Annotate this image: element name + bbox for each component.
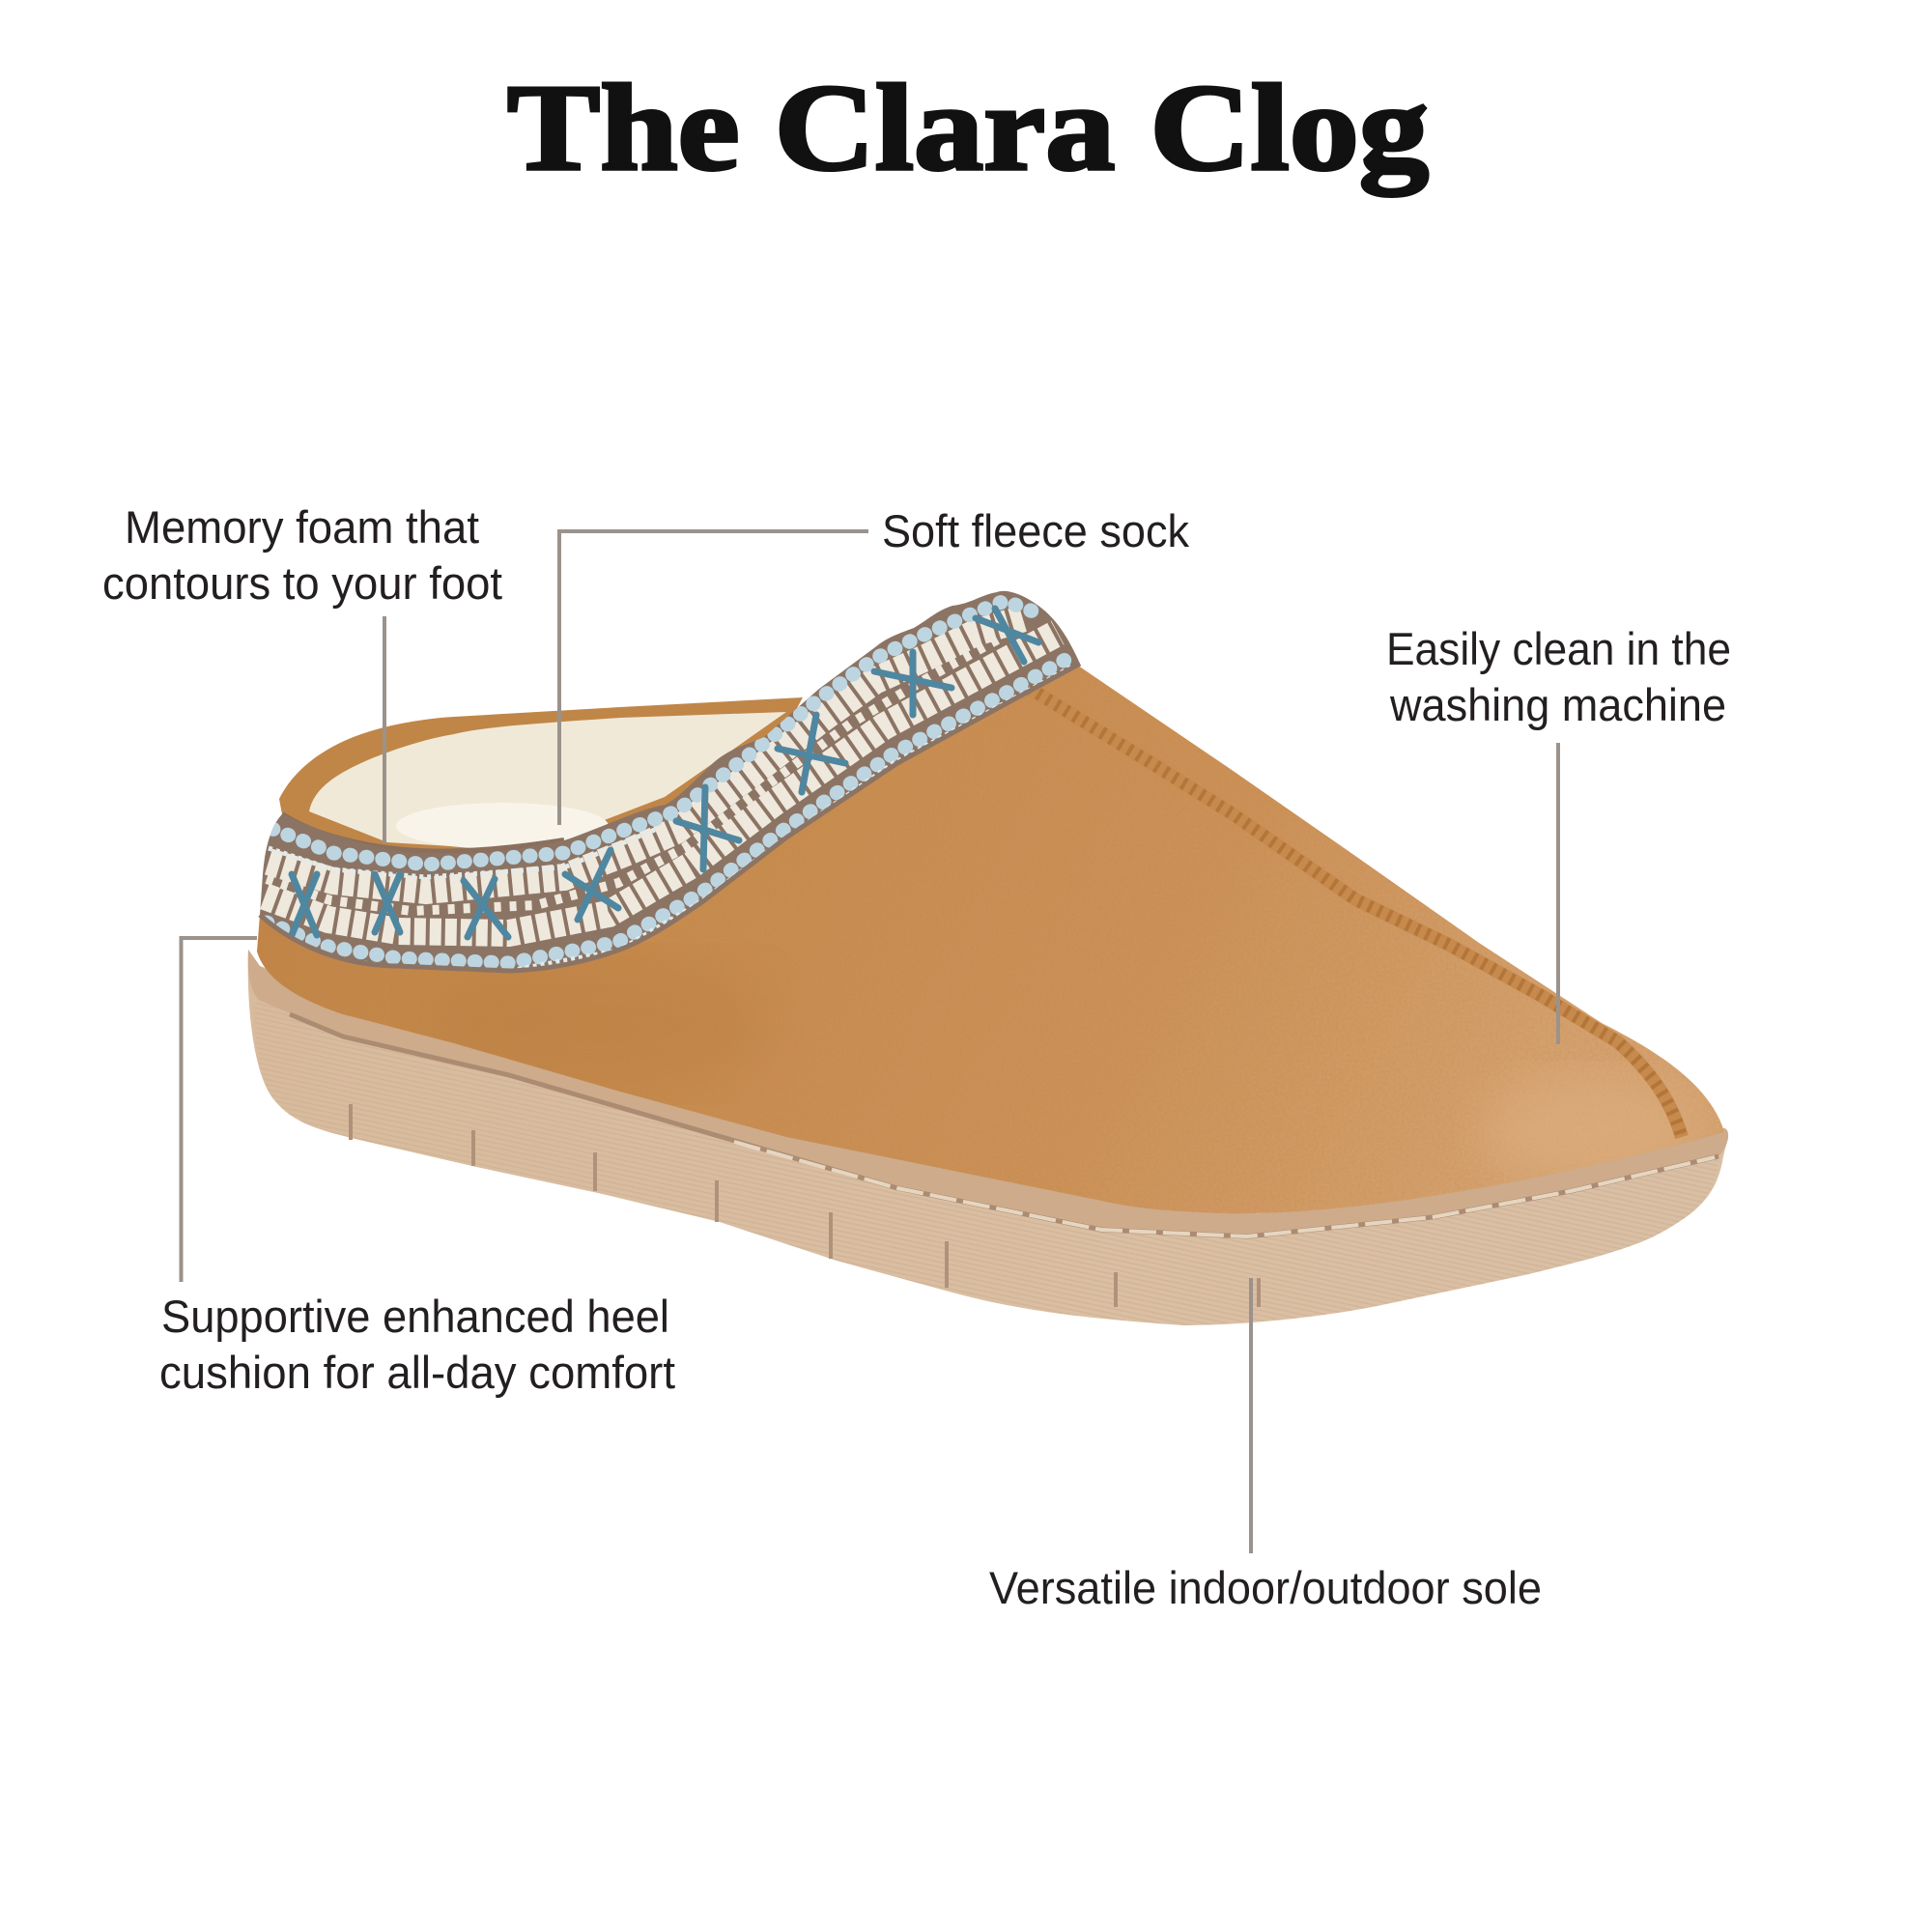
label: heel cushion: Supportive enhanced heel	[161, 1291, 669, 1342]
patterned collar band	[260, 591, 1080, 968]
blue x motifs	[292, 874, 317, 935]
collar lining	[279, 697, 803, 853]
sole	[248, 950, 1728, 1325]
leader: sole	[1249, 1278, 1253, 1553]
label: memory foam: Memory foam that	[125, 501, 479, 553]
label: heel cushion: cushion for all-day comfort	[159, 1347, 675, 1398]
label: sole: Versatile indoor/outdoor sole	[989, 1562, 1542, 1613]
shoe illustration	[242, 580, 1728, 1325]
title: The Clara Clog	[507, 59, 1429, 196]
label: memory foam: contours to your foot	[102, 557, 502, 609]
label: soft fleece sock: Soft fleece sock	[882, 505, 1189, 556]
leader: memory foam	[383, 616, 386, 843]
label: heel cushion	[159, 1291, 675, 1398]
label: easily clean: Easily clean in the	[1386, 623, 1731, 674]
leader: washing machine	[1556, 743, 1560, 1044]
stitching	[290, 1014, 1719, 1236]
leader: heel cushion	[182, 938, 257, 1282]
cream petals	[269, 618, 1024, 891]
rand strip	[248, 950, 1728, 1236]
label: memory foam	[102, 501, 502, 609]
suede upper	[257, 666, 1724, 1213]
label: easily clean	[1386, 623, 1731, 730]
label: easily clean: washing machine	[1389, 679, 1726, 730]
leader: soft fleece sock	[559, 531, 868, 825]
seam ridge	[1029, 688, 1682, 1137]
lug notches	[351, 1104, 1259, 1307]
blue dot borders	[272, 601, 1038, 865]
